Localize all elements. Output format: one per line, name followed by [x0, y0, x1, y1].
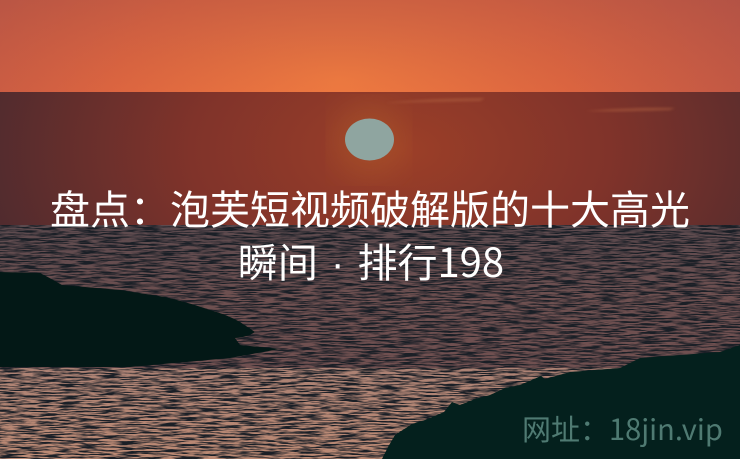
watermark: 网址：18jin.vip [522, 407, 723, 449]
title [50, 178, 690, 289]
title: 瞬间 · 排行198 [238, 231, 504, 289]
title: 盘点：泡芙短视频破解版的十大高光 [50, 178, 690, 236]
